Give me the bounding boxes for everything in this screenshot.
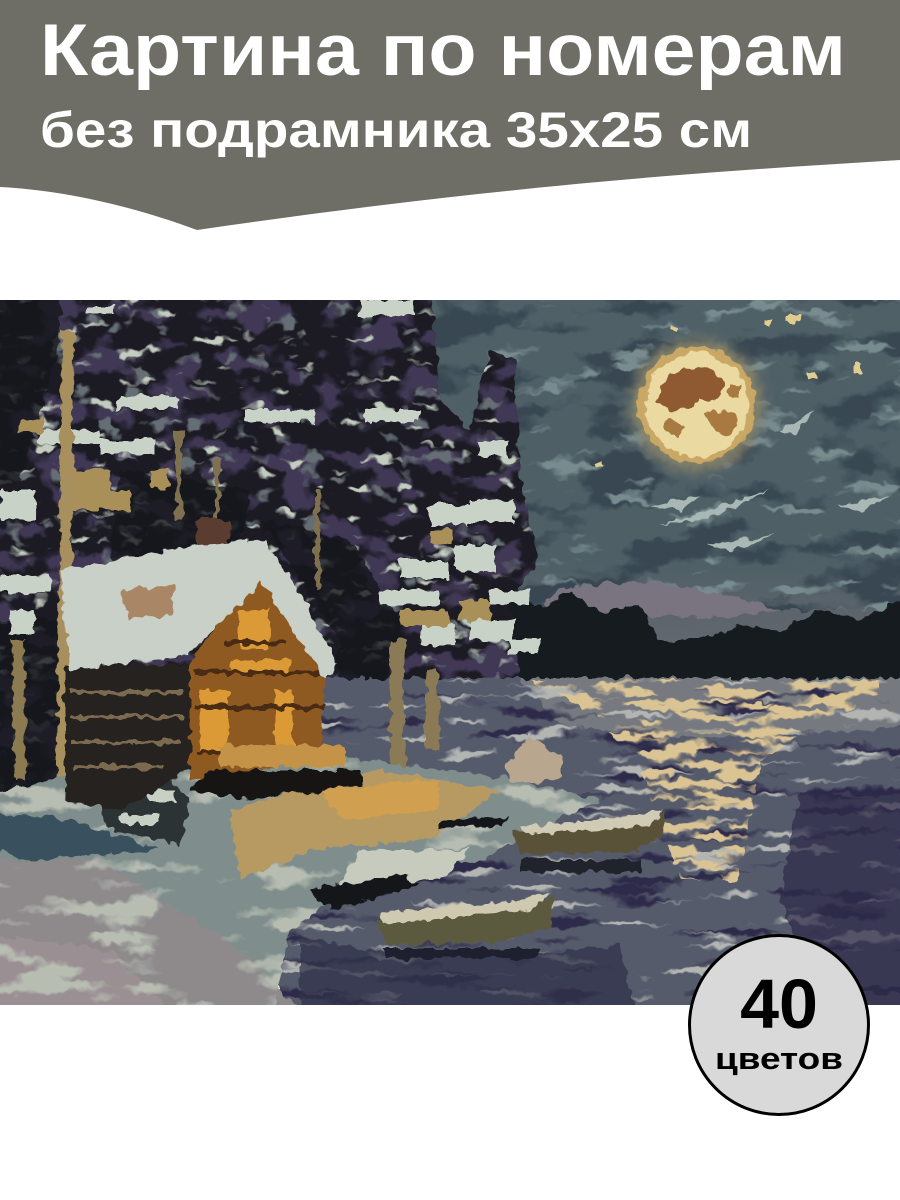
shore bush (505, 735, 560, 782)
sky (431, 300, 900, 643)
snowy shore foreground (0, 756, 600, 1005)
posts at cabin path (390, 640, 438, 770)
star dots (596, 316, 862, 467)
badge number: 40 (740, 965, 818, 1043)
far tree line (508, 592, 900, 682)
boat far (513, 808, 665, 872)
subtitle: без подрамника 35х25 см (40, 102, 752, 158)
snowy roof (60, 540, 338, 680)
tree trunks (56, 330, 74, 800)
title: Картина по номерам (40, 10, 846, 91)
water (280, 678, 900, 1030)
left forest (0, 300, 538, 792)
moon (631, 339, 763, 471)
cabin (60, 520, 360, 810)
snow on trees (0, 300, 540, 654)
boat near (377, 893, 555, 958)
moon reflection (530, 680, 880, 880)
painting: winter cabin by the lake (0, 280, 900, 1030)
badge label: цветов (715, 1041, 843, 1076)
badge: 40 colours (690, 936, 868, 1114)
header banner (0, 0, 900, 230)
dark shore strip (310, 815, 510, 910)
